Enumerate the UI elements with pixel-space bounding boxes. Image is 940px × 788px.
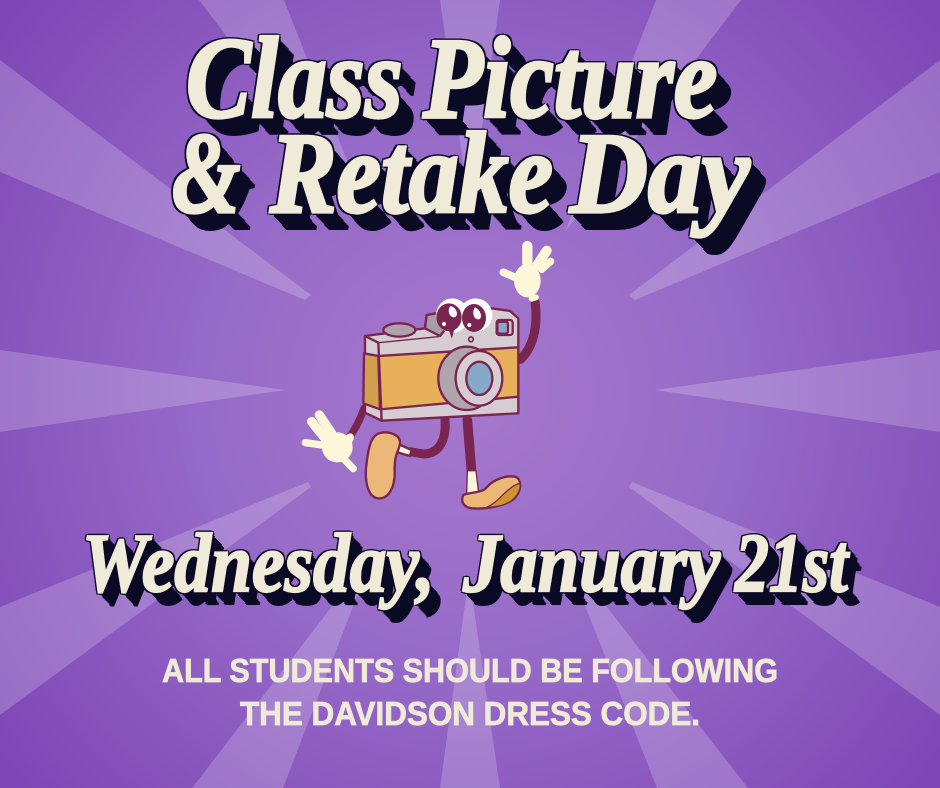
text block: dress code note: ALL STUDENTS SHOULD BE FOLLOWING	[162, 652, 778, 689]
shoes and socks	[366, 432, 520, 509]
text block: dress code note: THE DAVIDSON DRESS CODE.	[240, 695, 700, 732]
gloves	[305, 246, 551, 469]
title: Class Picture & Retake Day: Retake	[270, 110, 553, 238]
eyes	[436, 298, 492, 339]
camera body	[363, 308, 518, 421]
gloves outline	[347, 297, 536, 443]
limbs	[348, 302, 536, 473]
date: Wednesday, January 21st: January	[463, 517, 720, 610]
title: Class Picture & Retake Day: Day	[570, 110, 750, 238]
title: Class Picture & Retake Day	[171, 15, 766, 255]
date: Wednesday, January 21st: Wednesday,	[82, 517, 435, 610]
title: Class Picture & Retake Day: Class	[186, 15, 403, 143]
title: Class Picture & Retake Day: &	[172, 110, 240, 238]
date: Wednesday, January 21st: 21st	[735, 517, 848, 610]
date: Wednesday, January 21st	[82, 517, 862, 623]
title: Class Picture & Retake Day: Picture	[423, 15, 717, 143]
